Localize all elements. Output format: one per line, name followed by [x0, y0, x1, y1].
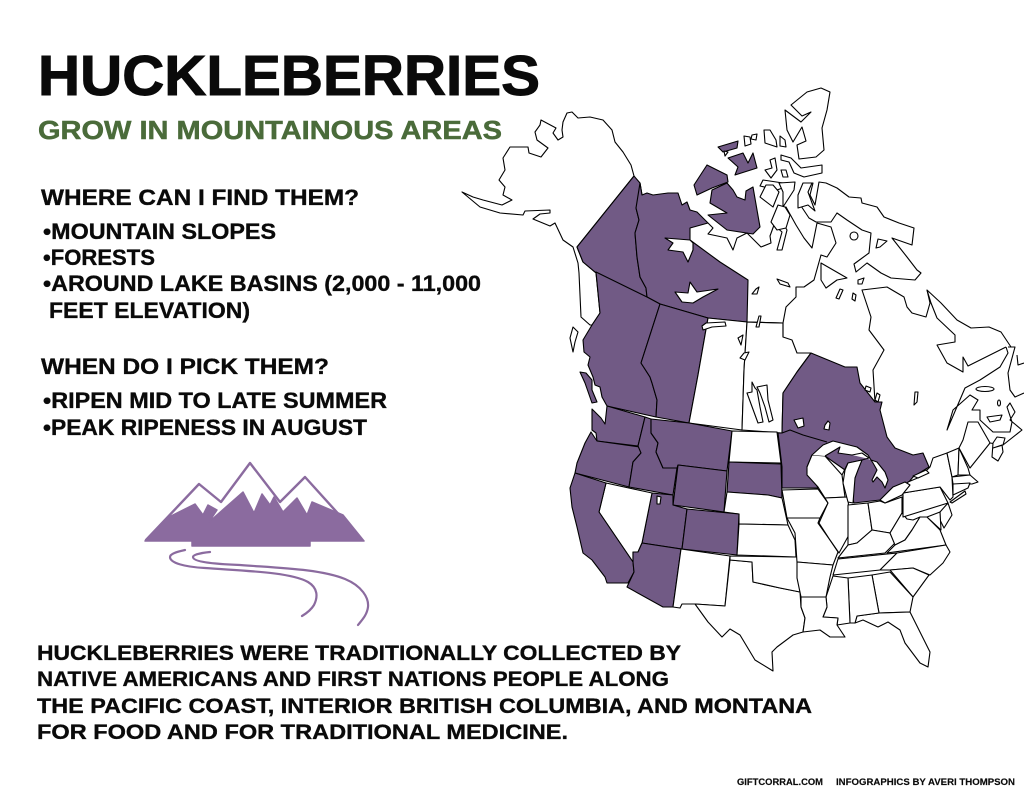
heading: where: WHERE CAN I FIND THEM? [41, 185, 359, 210]
title: HUCKLEBERRIES [38, 44, 540, 108]
Vancouver Island [580, 372, 597, 403]
Ontario lakes [794, 418, 804, 428]
list: timing: •RIPEN MID TO LATE SUMMER [43, 388, 387, 413]
Lake Winnipeg [747, 382, 773, 423]
footer credits: INFOGRAPHICS BY AVERI THOMPSON [836, 777, 1015, 788]
Haida Gwaii [570, 327, 578, 352]
icon: mountains and river [145, 463, 368, 625]
footer credits: GIFTCORRAL.COM [737, 777, 823, 788]
Upper Michigan and Lake Superior [812, 441, 871, 460]
New Mexico [673, 549, 730, 608]
Northwest Territories [635, 183, 748, 322]
Montana [651, 419, 732, 471]
Lake Michigan [843, 460, 862, 503]
Utah [642, 493, 687, 549]
text block: history: THE PACIFIC COAST, INTERIOR BRITISH COLUMBIA, AND MONTANA [37, 694, 812, 718]
text block: history [37, 641, 812, 744]
Ontario, Minnesota and Michigan purple area [778, 353, 929, 503]
Midwest and eastern states [782, 422, 990, 667]
British Columbia [583, 272, 660, 417]
text block: history: HUCKLEBERRIES WERE TRADITIONALLY COLLECTED BY [37, 641, 681, 665]
list: locations: •MOUNTAIN SLOPES [43, 219, 276, 244]
Colorado [682, 509, 739, 555]
list: locations: •FORESTS [43, 245, 155, 270]
Oklahoma [730, 556, 800, 592]
list: locations: •AROUND LAKE BASINS (2,000 - 11,000 [43, 271, 481, 296]
footer credits [737, 777, 1015, 788]
Nebraska [724, 492, 788, 525]
South Dakota [727, 462, 782, 498]
Washington [592, 406, 645, 446]
Idaho [629, 417, 677, 495]
list: locations: FEET ELEVATION) [49, 298, 250, 323]
heading: when: WHEN DO I PICK THEM? [41, 354, 329, 379]
Lake Erie and Lake Ontario [880, 470, 929, 503]
list: locations [43, 219, 481, 323]
text block: history: FOR FOOD AND FOR TRADITIONAL MEDICINE. [37, 720, 568, 744]
list: timing [43, 388, 387, 440]
California [570, 473, 634, 583]
subtitle: GROW IN MOUNTAINOUS AREAS [38, 115, 502, 145]
Canada mainland north coast [708, 207, 836, 337]
section: when to pick them [41, 354, 387, 440]
Quebec and Labrador [862, 287, 1011, 402]
list: timing: •PEAK RIPENESS IN AUGUST [43, 415, 368, 440]
Great Bear and Great Slave lakes [665, 238, 749, 360]
Kansas [737, 524, 796, 557]
Texas [695, 560, 805, 671]
Oregon [575, 432, 641, 487]
Wyoming [673, 465, 727, 512]
Arctic islands purple [694, 141, 760, 234]
Alaska [462, 112, 634, 325]
Ontario-Minnesota border [782, 430, 827, 442]
Eastern Canada and Atlantic [914, 347, 1024, 461]
Arizona [627, 543, 681, 607]
map: North America huckleberry range [462, 88, 1024, 671]
text block: history: NATIVE AMERICANS AND FIRST NATIONS PEOPLE ALONG [37, 667, 669, 691]
Arctic islands [724, 88, 921, 327]
section: where to find them [41, 185, 481, 323]
Great Salt Lake [657, 496, 661, 504]
Lake Huron and Saginaw Bay [871, 460, 888, 488]
Alberta [641, 304, 708, 423]
North Dakota [729, 431, 781, 463]
Nevada [599, 483, 652, 562]
Saskatchewan and Manitoba [689, 318, 747, 430]
Yukon [577, 176, 647, 297]
